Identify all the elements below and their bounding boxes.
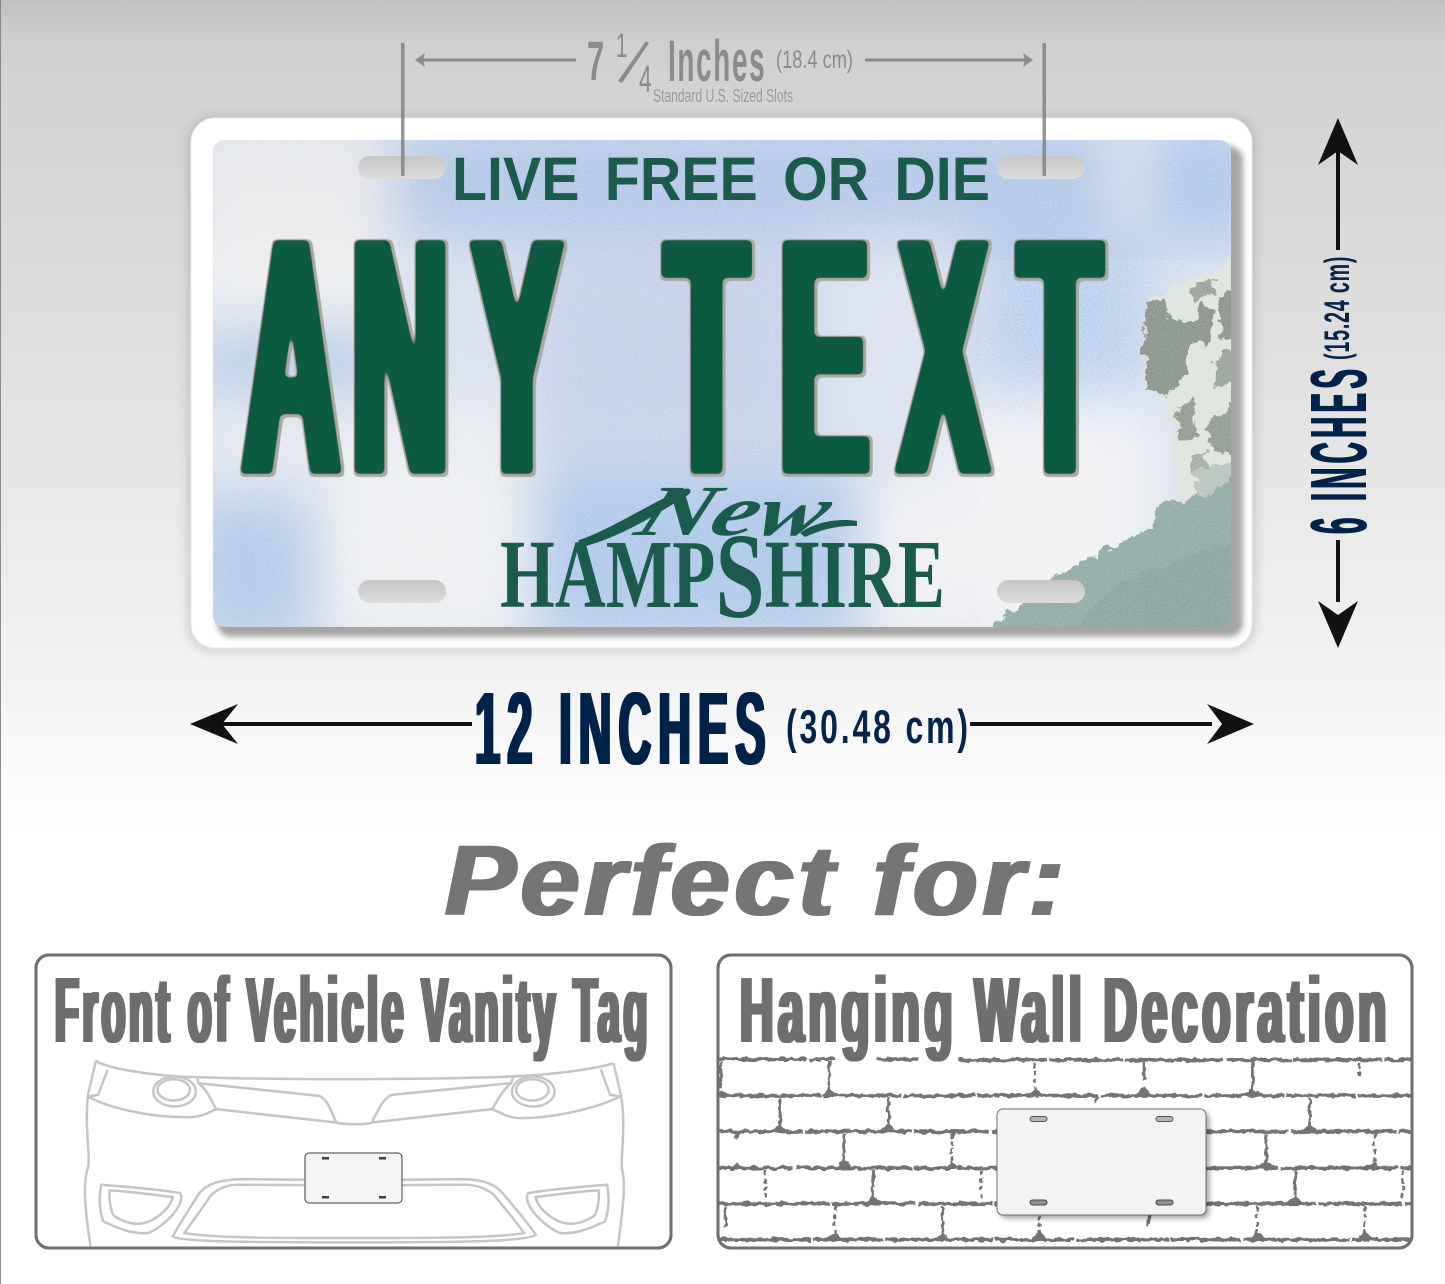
mounting slot: top right bbox=[997, 156, 1085, 179]
blank plate on wall bbox=[997, 1109, 1209, 1218]
mounting slot: top left bbox=[358, 156, 446, 179]
height dimension: 6 inches bbox=[1293, 118, 1383, 648]
panel heading: Hanging Wall Decoration bbox=[740, 957, 1391, 1062]
slot spacing dimension: 7 1/4 inches: 7 bbox=[587, 29, 604, 92]
slot spacing dimension: 7 1/4 inches bbox=[401, 27, 1046, 176]
state logo: New Hampshire: S bbox=[715, 509, 765, 644]
plate artwork: sky background bbox=[213, 140, 1231, 627]
width dimension: 12 inches bbox=[190, 671, 1254, 786]
state logo: New Hampshire: HIRE bbox=[765, 521, 945, 629]
mounting slot: bottom left bbox=[358, 580, 446, 603]
state logo: New Hampshire: New bbox=[624, 471, 846, 551]
mounting slot: bottom right bbox=[997, 580, 1085, 603]
state logo: New Hampshire: HAMP bbox=[500, 521, 715, 629]
slot spacing dimension: 7 1/4 inches: Inches bbox=[668, 29, 766, 94]
slot spacing dimension: 7 1/4 inches: (18.4 cm) bbox=[776, 46, 853, 74]
panel heading: Front of Vehicle Vanity Tag bbox=[55, 959, 651, 1063]
car front line drawing bbox=[85, 1061, 624, 1246]
height dimension: 6 inches: 6 INCHES bbox=[1293, 365, 1383, 534]
rock face: Old Man of the Mountain bbox=[980, 258, 1240, 640]
slot spacing dimension: 7 1/4 inches: 1 bbox=[616, 27, 627, 64]
plate text: ANY TEXT: ANY TEXT bbox=[243, 166, 1100, 546]
panel: hanging wall decoration bbox=[718, 955, 1412, 1248]
state motto: LIVE FREE OR DIE bbox=[452, 145, 990, 213]
state logo: New Hampshire bbox=[500, 471, 945, 644]
blank plate on car bbox=[305, 1153, 402, 1203]
heading: Perfect for: Perfect for: bbox=[445, 825, 1069, 936]
slot spacing dimension: 7 1/4 inches: 4 bbox=[639, 58, 652, 100]
width dimension: 12 inches: (30.48 cm) bbox=[786, 701, 971, 754]
panel: front of vehicle vanity tag bbox=[36, 955, 671, 1248]
width dimension: 12 inches: 12 INCHES bbox=[475, 671, 773, 786]
brick wall bbox=[719, 1059, 1411, 1240]
height dimension: 6 inches: (15.24 cm) bbox=[1318, 256, 1358, 360]
slot spacing dimension: 7 1/4 inches: Standard U.S. Sized Slots bbox=[653, 86, 793, 106]
license plate bbox=[187, 116, 1258, 652]
